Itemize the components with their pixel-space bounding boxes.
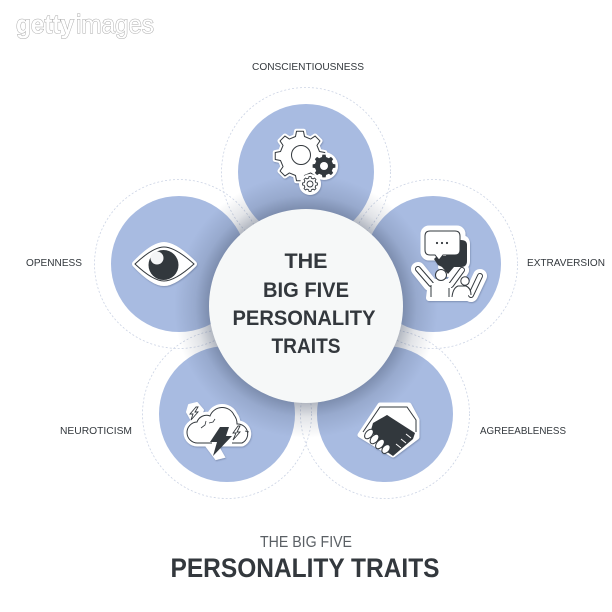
label: openness: OPENNESS <box>26 257 82 269</box>
subtitle: THE BIG FIVE <box>260 534 352 551</box>
icon: eye <box>135 245 194 283</box>
disc: extraversion <box>365 196 501 332</box>
watermark: gettyimages <box>16 9 154 39</box>
icon: storm cloud <box>187 403 249 459</box>
bottom title <box>170 534 440 583</box>
label: extraversion: EXTRAVERSION <box>527 257 605 269</box>
centre circle <box>209 209 403 403</box>
watermark: gettyimages: getty <box>16 9 74 39</box>
centre title <box>232 249 376 358</box>
dashed outer rings <box>94 88 518 498</box>
label: conscientiousness: CONSCIENTIOUSNESS <box>252 61 364 73</box>
centre title: BIG FIVE <box>263 278 349 302</box>
main title: PERSONALITY TRAITS <box>170 553 440 583</box>
disc: openness <box>111 196 247 332</box>
centre title: PERSONALITY <box>232 306 376 330</box>
centre title: TRAITS <box>272 334 340 358</box>
label: neuroticism: NEUROTICISM <box>60 425 132 437</box>
centre shadow <box>174 174 438 438</box>
disc: neuroticism <box>159 346 295 482</box>
icon: gears <box>275 131 338 195</box>
trait discs <box>111 104 501 482</box>
centre title: THE <box>284 249 328 273</box>
watermark: gettyimages: images <box>76 9 154 39</box>
disc: conscientiousness <box>238 104 374 240</box>
disc: agreeableness <box>317 346 453 482</box>
label: agreeableness: AGREEABLENESS <box>480 425 566 437</box>
icon: people with speech bubbles <box>418 228 480 298</box>
icon: handshake <box>360 405 417 456</box>
